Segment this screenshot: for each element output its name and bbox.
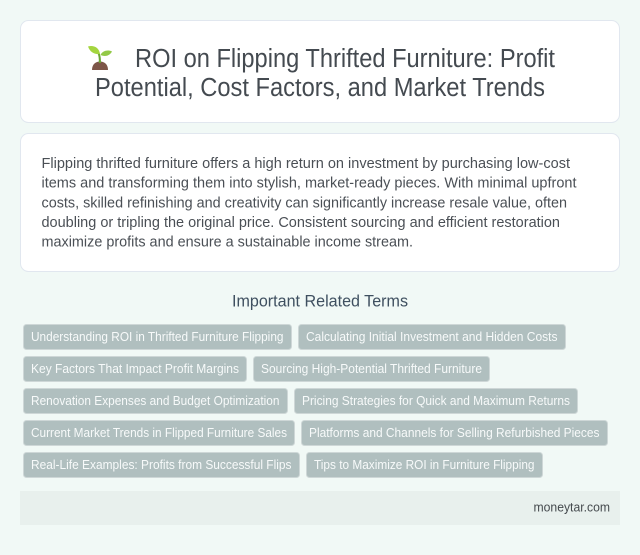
- title text: ROI on Flipping Thrifted Furniture: Profit: [135, 45, 555, 73]
- tag: understanding ROI: [24, 324, 292, 350]
- title text: Potential, Cost Factors, and Market Trends: [95, 74, 545, 102]
- tag: real-life examples: [24, 452, 300, 478]
- summary paragraph: items and transforming them into stylish, market-ready pieces. With minimal upfront: [42, 174, 577, 192]
- summary paragraph: Flipping thrifted furniture offers a high return on investment by purchasing low-cost: [42, 155, 571, 172]
- tag: calculating investment: [298, 324, 566, 350]
- tag: real-life examples: Real-Life Examples: Profits from Successful Flips: [31, 458, 292, 472]
- tag: tips: Tips to Maximize ROI in Furniture Flipping: [314, 458, 534, 472]
- tag: calculating investment: Calculating Initial Investment and Hidden Costs: [306, 330, 558, 344]
- tag: sourcing: [254, 356, 490, 382]
- tag: renovation: [24, 388, 288, 414]
- tag: market trends: Current Market Trends in Flipped Furniture Sales: [31, 426, 287, 440]
- panel: summary card: [20, 134, 620, 272]
- title text: [95, 45, 555, 102]
- footer source: moneytar.com: [534, 500, 610, 514]
- tag: pricing: [294, 388, 578, 414]
- summary paragraph: maximize profits and ensure a sustainable income stream.: [42, 234, 413, 250]
- tag: platforms: Platforms and Channels for Selling Refurbished Pieces: [309, 426, 600, 440]
- heading: important related terms: Important Related Terms: [232, 292, 408, 310]
- footer: [20, 491, 620, 525]
- panel: title card: [20, 20, 620, 122]
- tag: platforms: [302, 420, 608, 446]
- tag: sourcing: Sourcing High-Potential Thrifted Furniture: [261, 362, 482, 376]
- tag: pricing: Pricing Strategies for Quick and Maximum Returns: [302, 394, 570, 408]
- tag: understanding ROI: Understanding ROI in Thrifted Furniture Flipping: [31, 330, 284, 344]
- summary paragraph: costs, skilled refinishing and creativity can significantly increase resale value, often: [42, 194, 567, 212]
- tag: key factors: [24, 356, 246, 382]
- panel: related term tags: [24, 324, 608, 478]
- tag: key factors: Key Factors That Impact Profit Margins: [31, 362, 239, 376]
- summary paragraph: [42, 155, 577, 250]
- tag: market trends: [24, 420, 294, 446]
- tag: renovation: Renovation Expenses and Budget Optimization: [31, 394, 280, 408]
- tag: tips: [306, 452, 542, 478]
- icon: sprout: [88, 46, 112, 70]
- summary paragraph: doubling or tripling the original price. Consistent sourcing and efficient restoration: [42, 214, 560, 231]
